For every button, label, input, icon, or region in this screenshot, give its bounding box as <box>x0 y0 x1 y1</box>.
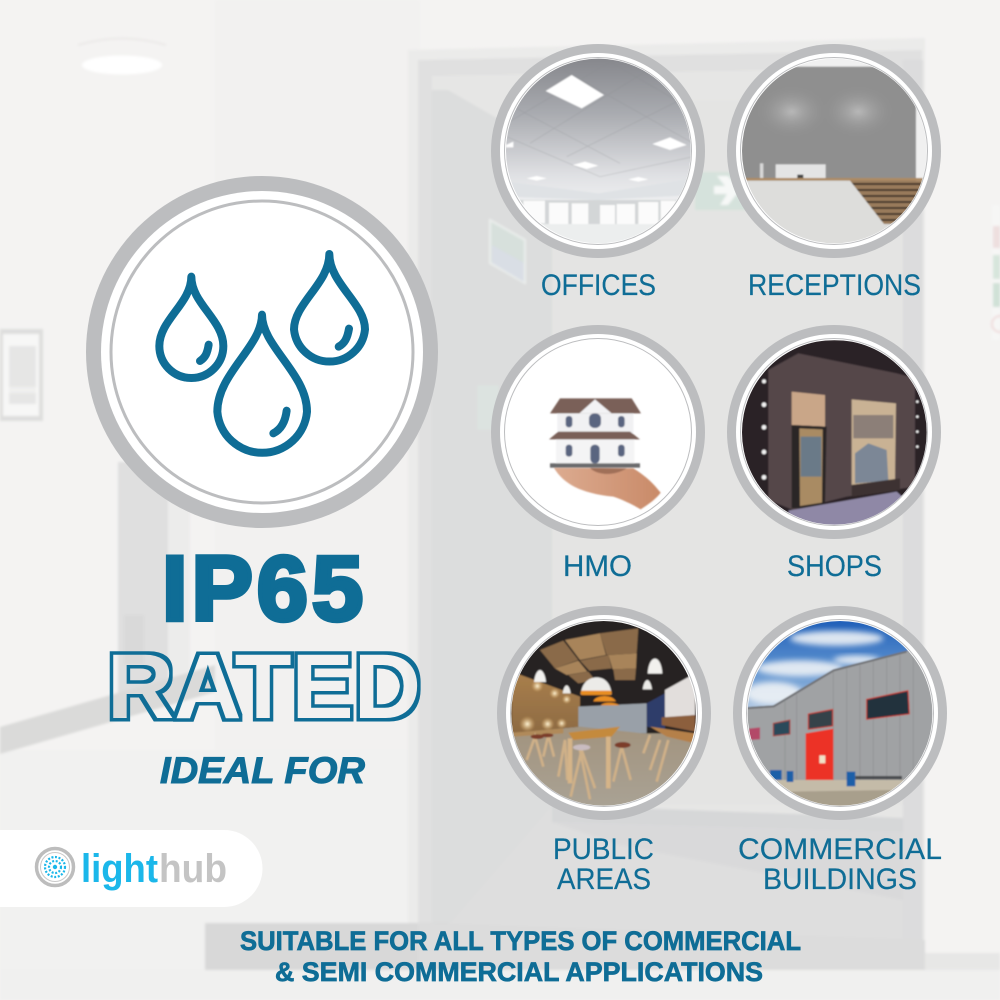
footer text: & SEMI COMMERCIAL APPLICATIONS <box>275 957 763 987</box>
label: receptions: RECEPTIONS <box>748 269 921 302</box>
label: commercial buildings: COMMERCIAL <box>738 833 942 866</box>
picture frame on wall <box>0 329 43 421</box>
photo: house on a hand <box>549 398 661 509</box>
icon: lighthub disc <box>36 848 74 886</box>
logo: lighthub pill: hub <box>159 847 227 891</box>
footer text: SUITABLE FOR ALL TYPES OF COMMERCIAL <box>240 926 801 956</box>
icon: three water drops <box>159 254 365 453</box>
ceiling light <box>78 38 166 74</box>
panel: offices <box>491 44 705 258</box>
label: shops: SHOPS <box>787 550 882 583</box>
heading: IP65: IP65 <box>162 538 363 640</box>
wall sign on door <box>490 220 525 283</box>
label: public areas: AREAS <box>557 863 651 896</box>
logo: lighthub pill <box>0 830 262 907</box>
label: public areas <box>553 833 654 896</box>
photo: reception desk <box>740 57 930 247</box>
heading: RATED outlined: RATED <box>107 636 421 738</box>
panel: receptions <box>727 44 941 258</box>
hero badge: water drops <box>86 176 438 528</box>
photo: office ceiling <box>503 57 693 247</box>
panel: commercial buildings <box>733 606 947 820</box>
panel: public areas <box>497 606 711 820</box>
photo: shop front <box>740 340 930 533</box>
door frame <box>205 38 925 970</box>
photo: bar interior <box>510 620 697 807</box>
label: public areas: PUBLIC <box>553 833 654 866</box>
panel: shops <box>727 325 941 539</box>
photo: industrial unit <box>745 620 935 807</box>
wall safety signs <box>992 205 1000 340</box>
exit sign <box>695 172 755 210</box>
label: offices: OFFICES <box>541 269 656 302</box>
logo: lighthub pill: light <box>81 847 158 891</box>
side corridor opening <box>118 462 190 702</box>
label: commercial buildings <box>738 833 942 896</box>
label: commercial buildings: BUILDINGS <box>763 863 917 896</box>
heading: IDEAL FOR: IDEAL FOR <box>160 750 365 791</box>
skirting board <box>0 665 215 754</box>
panel: HMO <box>491 325 705 539</box>
footer text <box>240 926 801 987</box>
label: HMO: HMO <box>563 550 632 583</box>
